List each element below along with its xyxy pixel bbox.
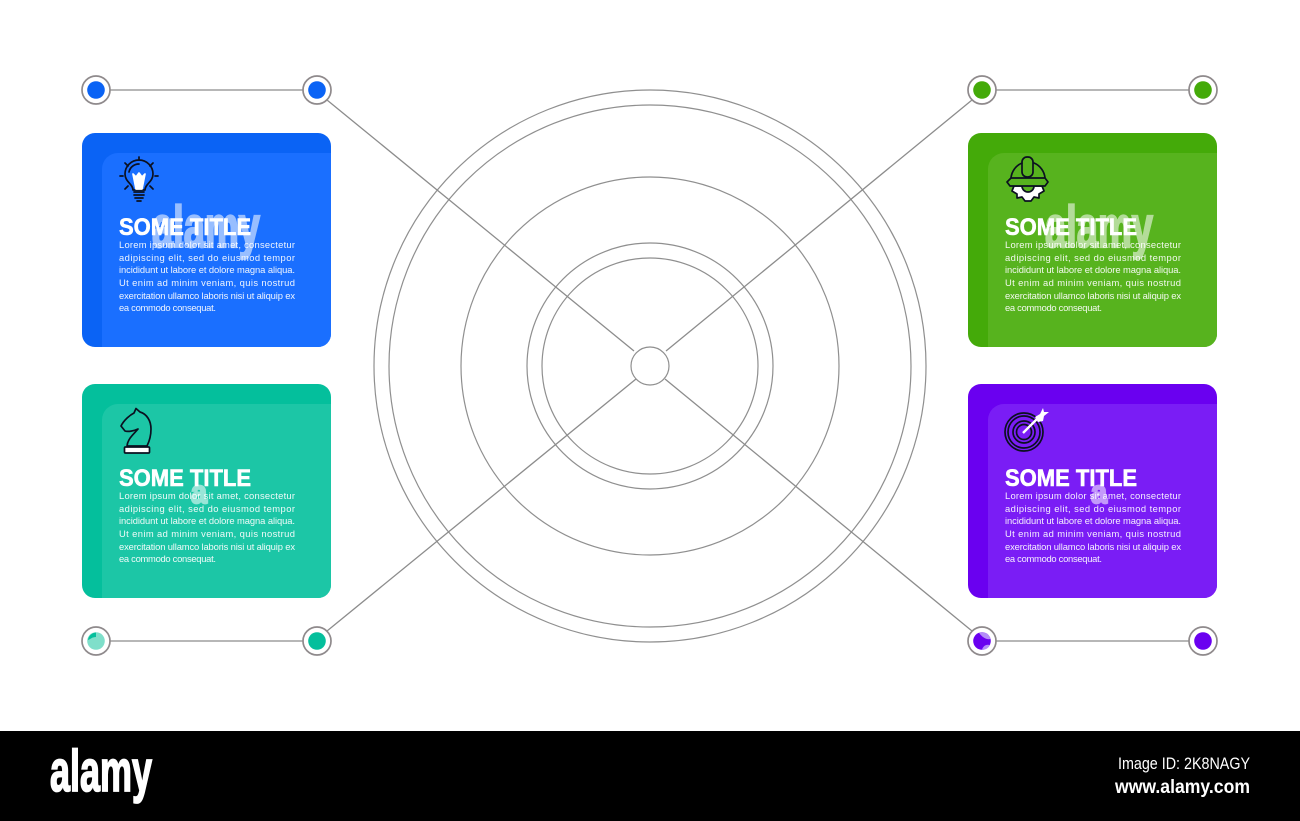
- heading: SOME TITLE: [1005, 465, 1137, 492]
- website: www.alamy.com: [1114, 777, 1250, 798]
- diagonal connector lines: [327, 100, 972, 631]
- body text: incididunt ut labore et dolore magna aliqua.: [1005, 264, 1181, 275]
- body text: adipiscing elit, sed do eiusmod tempor: [1005, 503, 1181, 514]
- icon: target with arrow: [1005, 408, 1049, 451]
- body text: incididunt ut labore et dolore magna aliqua.: [119, 515, 295, 526]
- panel: teal card: [82, 384, 331, 598]
- body text: ea commodo consequat.: [119, 553, 216, 564]
- watermark: alamy: [1045, 195, 1153, 260]
- body text: exercitation ullamco laboris nisi ut aliquip ex: [119, 290, 295, 301]
- icon: light bulb: [120, 157, 158, 201]
- body text: Ut enim ad minim veniam, quis nostrud: [119, 528, 295, 539]
- connector: bottom left: [82, 627, 331, 655]
- connector: top left: [82, 76, 331, 104]
- icon: chess knight: [121, 408, 151, 453]
- body text: Lorem ipsum dolor sit amet, consectetur: [119, 490, 295, 501]
- body text: exercitation ullamco laboris nisi ut aliquip ex: [119, 541, 295, 552]
- body text: Ut enim ad minim veniam, quis nostrud: [1005, 277, 1181, 288]
- body text: adipiscing elit, sed do eiusmod tempor: [1005, 252, 1181, 263]
- heading: SOME TITLE: [1005, 214, 1137, 241]
- body text: [119, 490, 295, 564]
- body text: exercitation ullamco laboris nisi ut aliquip ex: [1005, 290, 1181, 301]
- body text: Ut enim ad minim veniam, quis nostrud: [119, 277, 295, 288]
- body text: ea commodo consequat.: [119, 302, 216, 313]
- watermark: a: [1091, 474, 1107, 510]
- central concentric circles: [374, 90, 926, 642]
- body text: exercitation ullamco laboris nisi ut aliquip ex: [1005, 541, 1181, 552]
- panel: purple card: [968, 384, 1217, 598]
- body text: ea commodo consequat.: [1005, 302, 1102, 313]
- body text: Ut enim ad minim veniam, quis nostrud: [1005, 528, 1181, 539]
- connector: bottom right: [968, 627, 1217, 655]
- footer band: [0, 731, 1300, 821]
- body text: [1005, 490, 1181, 564]
- watermark: a: [191, 474, 207, 510]
- heading: SOME TITLE: [119, 465, 251, 492]
- footer logo: alamy: [50, 739, 152, 804]
- heading: SOME TITLE: [119, 214, 251, 241]
- body text: Lorem ipsum dolor sit amet, consectetur: [1005, 239, 1181, 250]
- body text: [119, 239, 295, 313]
- watermark: alamy: [152, 195, 260, 260]
- body text: adipiscing elit, sed do eiusmod tempor: [119, 252, 295, 263]
- panel: blue card: [82, 133, 331, 347]
- body text: Lorem ipsum dolor sit amet, consectetur: [119, 239, 295, 250]
- image id: Image ID: 2K8NAGY: [1118, 754, 1250, 773]
- panel: green card: [968, 133, 1217, 347]
- body text: adipiscing elit, sed do eiusmod tempor: [119, 503, 295, 514]
- body text: Lorem ipsum dolor sit amet, consectetur: [1005, 490, 1181, 501]
- body text: [1005, 239, 1181, 313]
- connector: top right: [968, 76, 1217, 104]
- body text: incididunt ut labore et dolore magna aliqua.: [119, 264, 295, 275]
- body text: ea commodo consequat.: [1005, 553, 1102, 564]
- icon: helmet with gear: [1007, 157, 1048, 201]
- body text: incididunt ut labore et dolore magna aliqua.: [1005, 515, 1181, 526]
